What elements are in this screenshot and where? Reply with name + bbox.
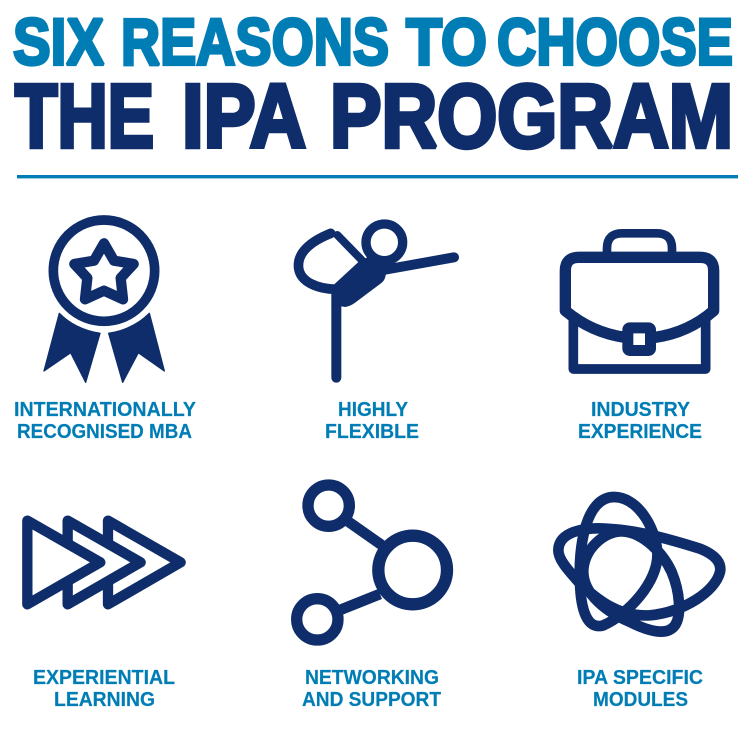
label: IPA specific modules (577, 666, 703, 711)
icon: flexible gymnast (298, 224, 454, 378)
title line 1: REASONS (121, 4, 389, 78)
label: industry experience: INDUSTRY (591, 398, 690, 421)
label: networking and support: AND SUPPORT (302, 688, 441, 711)
title line 2: IPA (182, 67, 306, 167)
label: IPA specific modules: MODULES (593, 688, 688, 711)
title rule (17, 175, 738, 178)
label: experiential learning: LEARNING (54, 688, 155, 711)
icon: award ribbon (44, 220, 164, 382)
icon: briefcase (565, 233, 714, 369)
icon: fast-forward triangles (27, 521, 181, 604)
icon: network nodes (297, 485, 447, 640)
label: networking and support (302, 666, 441, 711)
label: industry experience (578, 398, 702, 443)
label: IPA specific modules: IPA SPECIFIC (577, 666, 703, 689)
label: experiential learning: EXPERIENTIAL (33, 666, 175, 689)
title line 2: THE (15, 67, 154, 167)
title line 2 (15, 67, 733, 167)
title line 1 (13, 4, 733, 78)
label: highly flexible: HIGHLY (338, 398, 408, 421)
label: internationally recognised MBA (14, 398, 196, 443)
icon: atom orbits (558, 497, 720, 632)
title (13, 4, 733, 167)
label: experiential learning (33, 666, 175, 711)
label: internationally recognised MBA: RECOGNISED MBA (17, 420, 192, 443)
label: industry experience: EXPERIENCE (578, 420, 702, 443)
label: networking and support: NETWORKING (305, 666, 439, 689)
title line 1: TO (406, 4, 487, 78)
title line 1: SIX (13, 4, 104, 78)
label: internationally recognised MBA: INTERNATIONALLY (14, 398, 196, 421)
label: highly flexible (325, 398, 419, 443)
label: highly flexible: FLEXIBLE (325, 420, 419, 443)
